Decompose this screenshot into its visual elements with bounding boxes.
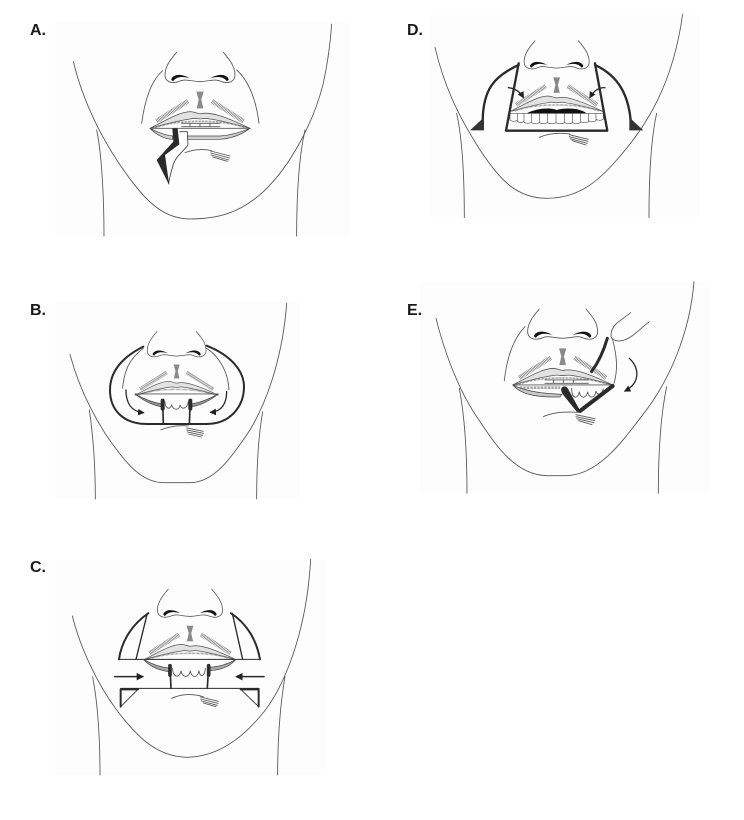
neck lines xyxy=(457,113,657,218)
left upper flap xyxy=(119,613,148,659)
label B: B. xyxy=(30,302,46,319)
nose and upper lip xyxy=(510,41,603,111)
horizontal incision lines xyxy=(118,659,260,688)
nasolabial fold xyxy=(504,327,525,381)
chin crease xyxy=(185,150,230,161)
nose and upper lip xyxy=(143,589,236,660)
teeth and mouth line xyxy=(150,123,250,128)
zigzag incision xyxy=(157,128,179,185)
right flap curve and triangle xyxy=(595,65,643,130)
jaw outline xyxy=(73,24,332,219)
rotation arrow xyxy=(625,358,637,391)
nasolabial folds xyxy=(142,70,259,123)
teeth row xyxy=(510,113,603,124)
panel C: wedge excisions xyxy=(72,559,311,775)
nose and upper lip xyxy=(150,52,250,128)
neck lines xyxy=(93,677,285,775)
panel E: finger-lifted flap xyxy=(436,282,694,493)
label C: C. xyxy=(30,559,46,576)
label D: D. xyxy=(407,22,423,39)
chin crease xyxy=(539,133,588,145)
label A: A. xyxy=(30,22,46,39)
left arrow xyxy=(115,674,143,679)
nasolabial folds xyxy=(123,348,229,390)
label E: E. xyxy=(407,302,422,319)
neck lines xyxy=(97,130,305,236)
exposed mouth gap xyxy=(527,109,587,113)
vertical incisions xyxy=(163,400,190,424)
teeth and lower lip xyxy=(135,394,218,409)
left triangle xyxy=(121,689,138,707)
lower lip xyxy=(143,659,236,672)
right arrow xyxy=(590,88,605,97)
jaw outline xyxy=(70,303,287,483)
trapezoid incision xyxy=(506,63,607,131)
neck lines xyxy=(89,410,263,499)
jaw outline xyxy=(436,282,694,476)
right arrow xyxy=(237,674,264,679)
chin crease xyxy=(172,695,218,707)
right arrow xyxy=(211,392,227,412)
flap outline xyxy=(169,132,188,184)
chin crease xyxy=(543,412,595,425)
teeth and lower lip xyxy=(513,380,613,397)
left flap curve and triangle xyxy=(470,65,519,130)
nose and upper lip xyxy=(135,331,219,395)
nose and upper lip xyxy=(513,309,613,385)
teeth xyxy=(173,668,205,676)
left arrow xyxy=(508,88,523,97)
flap edge xyxy=(612,338,617,383)
panel A: face with zigzag incision xyxy=(73,24,332,236)
jaw outline xyxy=(435,14,683,198)
thumb xyxy=(611,313,649,341)
jaw outline xyxy=(72,559,311,757)
vertical incisions xyxy=(170,665,209,688)
left arrow xyxy=(126,390,143,413)
curved flap incision xyxy=(110,346,244,424)
right triangle xyxy=(241,689,259,707)
panel B: bilateral curved flaps xyxy=(70,303,287,499)
lower lip xyxy=(150,128,250,139)
chin crease xyxy=(161,426,203,437)
upper thick incision xyxy=(592,338,607,372)
neck lines xyxy=(459,387,667,493)
right upper flap xyxy=(231,613,260,659)
lower thick incision xyxy=(561,386,613,412)
panel D: trapezoid flap with teeth xyxy=(435,14,683,218)
